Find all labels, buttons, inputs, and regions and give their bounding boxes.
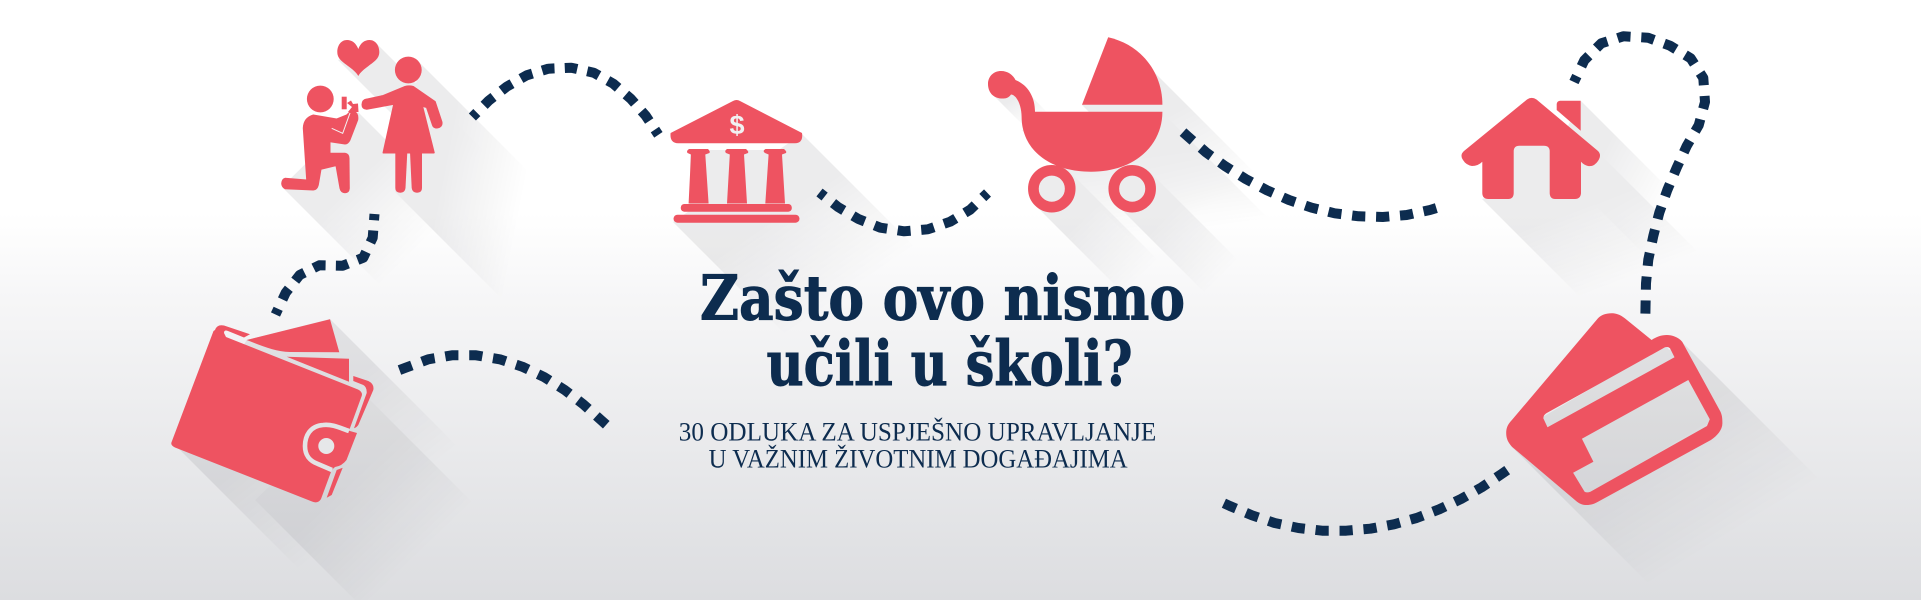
dashed path: pram to house (1179, 128, 1442, 217)
heart (337, 40, 379, 76)
icon: pram (988, 37, 1162, 207)
title: Zašto ovo nismo (700, 261, 1185, 334)
shadow: pram (991, 68, 1272, 295)
chimney (1557, 101, 1581, 131)
subtitle: 30 ODLUKA ZA USPJEŠNO UPRAVLJANJE (679, 418, 1156, 447)
woman (362, 57, 442, 193)
banknotes (247, 319, 339, 352)
clasp (305, 425, 349, 470)
icon: couple with heart and ring (282, 40, 442, 193)
back flap (353, 376, 373, 428)
dashed path: house to credit card (1574, 36, 1705, 319)
dashed path: wallet to couple (276, 214, 374, 314)
dashed path: wallet to centre (394, 355, 610, 428)
man kneeling (282, 86, 358, 193)
basket and handle (988, 71, 1162, 172)
bank roof (670, 100, 802, 143)
shadow: bank (673, 134, 917, 337)
icon: credit card (1506, 313, 1722, 505)
wallet front (171, 325, 362, 502)
dashed path: credit card to centre (1219, 467, 1512, 531)
dollar sign: $ (729, 110, 745, 140)
shadow: house (1482, 101, 1700, 299)
shadow: credit card (1512, 342, 1822, 587)
icon: bank (670, 100, 802, 223)
shadow: couple (282, 43, 530, 302)
shadow: wallet (172, 319, 475, 600)
hood (1082, 37, 1162, 105)
wheels (1033, 170, 1070, 207)
dashed path: bank to pram (820, 192, 988, 231)
subtitle (679, 418, 1156, 473)
icon: wallet (171, 319, 373, 502)
dashed path: couple to bank (472, 68, 658, 135)
icon: house (1461, 98, 1600, 199)
base (681, 204, 792, 212)
title (700, 261, 1185, 400)
subtitle: U VAŽNIM ŽIVOTNIM DOGAĐAJIMA (709, 444, 1128, 473)
columns (687, 149, 786, 204)
house body (1461, 98, 1600, 199)
title: učili u školi? (766, 327, 1132, 400)
